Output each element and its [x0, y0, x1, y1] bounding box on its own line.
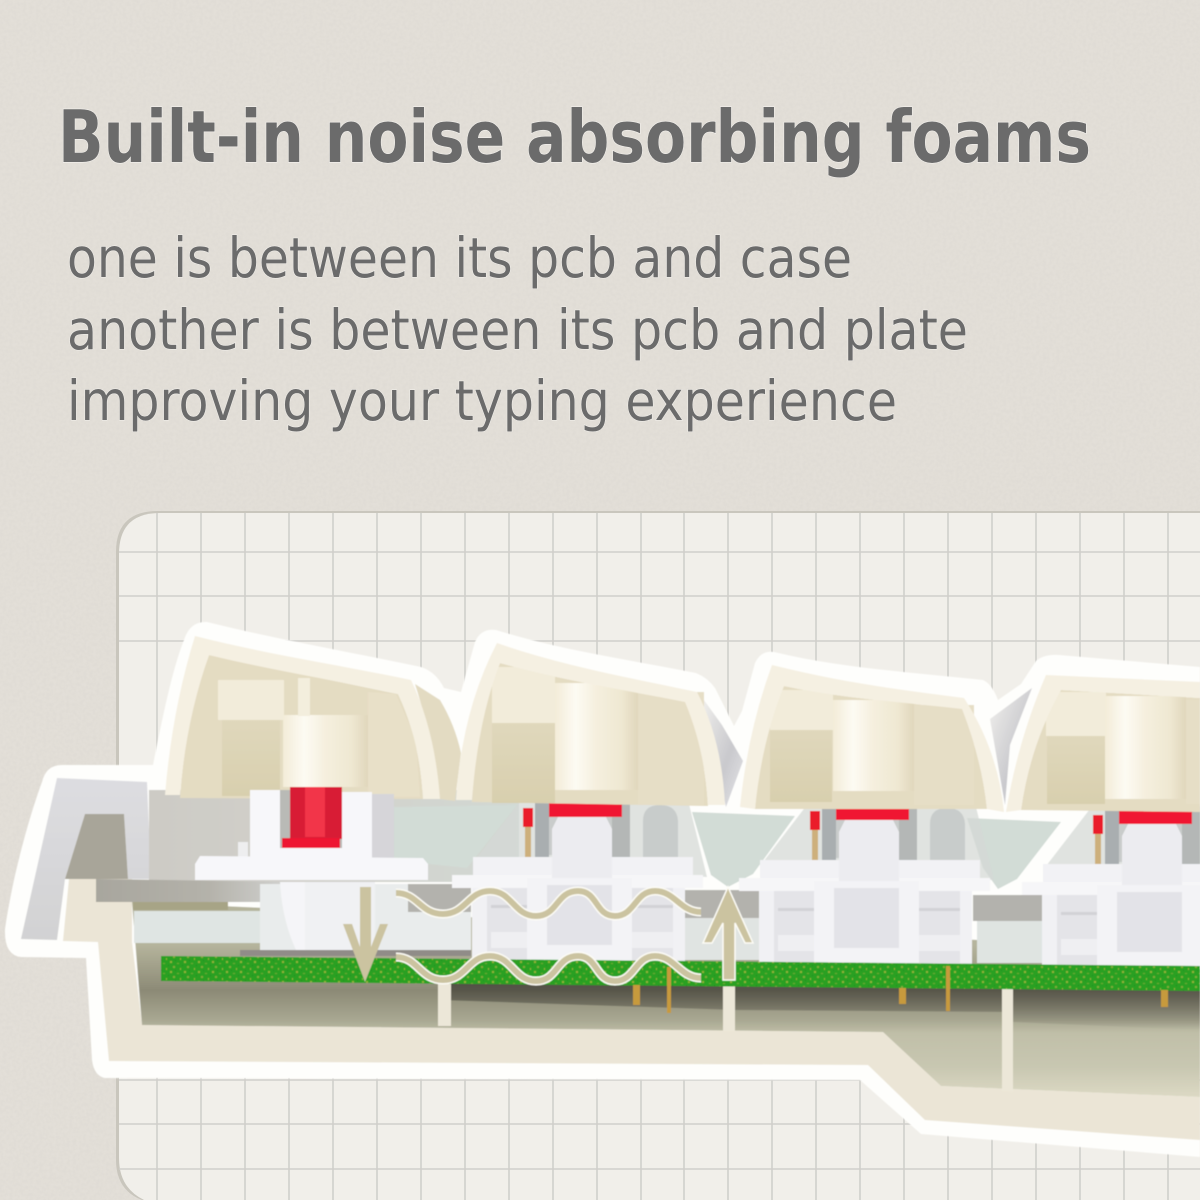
panel: grid paper — [116, 511, 1200, 1200]
keyboard cross-section — [5, 622, 1200, 1157]
support walls — [438, 980, 1013, 1092]
white sticker outline — [5, 622, 1200, 1157]
description text: another is between its pcb and plate — [67, 298, 968, 362]
lower sound wave — [396, 956, 701, 981]
upper sound wave — [396, 891, 701, 916]
description text: one is between its pcb and case — [67, 226, 852, 290]
foam layer, lower — [134, 911, 264, 943]
keycap 4 — [1006, 675, 1200, 812]
upper case bezel — [21, 778, 151, 940]
arrow: up — [703, 887, 753, 980]
keycap 2 — [456, 643, 725, 806]
switch 4 — [1022, 800, 1200, 969]
description text — [67, 226, 968, 433]
solder pins — [633, 966, 1168, 1013]
plate backdrop — [149, 790, 519, 882]
plate edge — [96, 879, 300, 902]
shadow under pcb — [440, 976, 1200, 1030]
bezel opening — [65, 814, 128, 879]
case — [63, 879, 1200, 1140]
switch 3 — [739, 796, 994, 965]
arrow: down — [343, 887, 388, 982]
plate gaps — [408, 884, 1043, 921]
switch 1, cut section — [195, 787, 428, 950]
case cavity — [132, 902, 1200, 1097]
keycap 3 — [740, 665, 1004, 812]
side of neighbouring keycaps — [415, 684, 1032, 807]
description text: improving your typing experience — [67, 369, 897, 433]
frosted wedges — [390, 805, 1061, 889]
pcb — [161, 956, 1200, 991]
switch 2 — [452, 793, 707, 962]
keycap 1 — [165, 636, 440, 799]
